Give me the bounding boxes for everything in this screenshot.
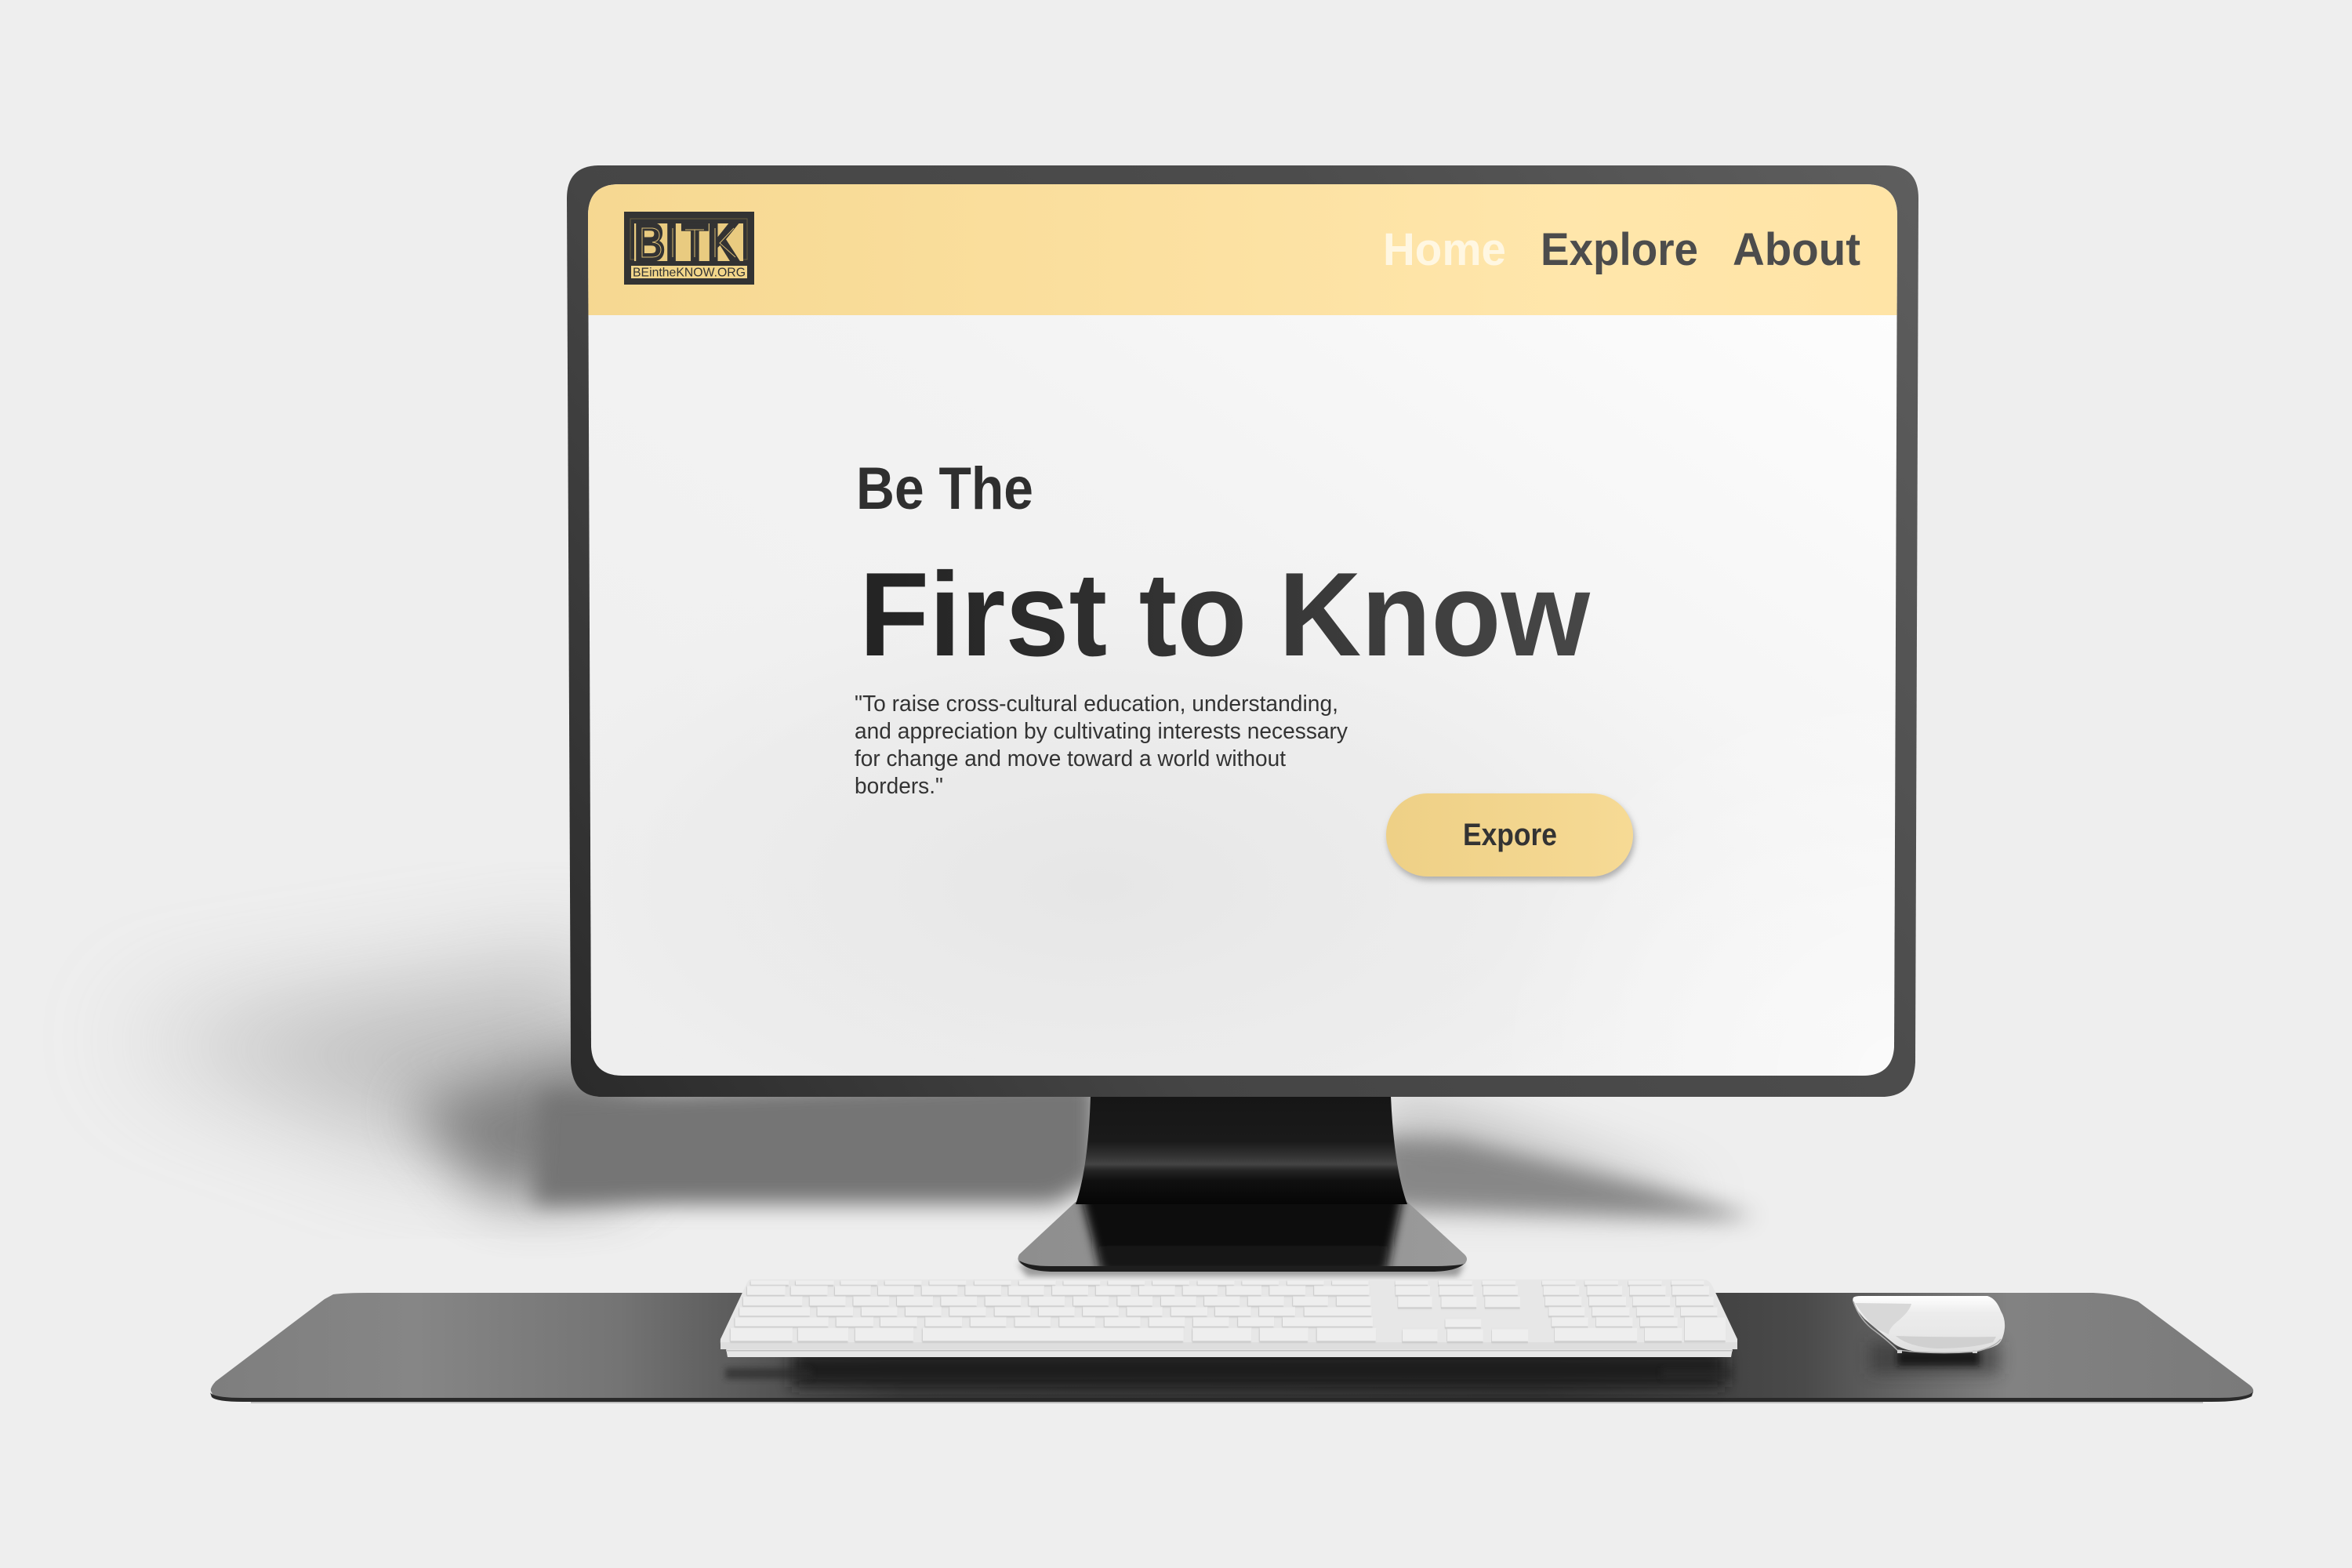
home row — [739, 1307, 1372, 1316]
mission quote: for change and move toward a world without — [855, 746, 1286, 771]
navigation keys — [1395, 1280, 1520, 1308]
keyboard body — [720, 1279, 1737, 1348]
stand base reflection — [1076, 1202, 1409, 1266]
monitor stand — [1018, 1096, 1467, 1276]
function row — [750, 1280, 1369, 1285]
stand base — [1018, 1202, 1467, 1269]
button: Expore — [1386, 793, 1633, 877]
navigation and numeric key blocks — [1395, 1280, 1726, 1341]
mouse feet — [1897, 1350, 1977, 1353]
keyboard bottom strip — [726, 1348, 1733, 1357]
mat front lip — [210, 1392, 2253, 1402]
heading: First to Know: First to Know — [859, 548, 1591, 681]
nav: About: About — [1733, 224, 1860, 275]
BITK logo: BEintheKNOW.ORG — [633, 267, 746, 279]
keyboard — [720, 1279, 1737, 1357]
cast shadow: left of monitor — [118, 956, 1098, 1204]
website header bar — [580, 176, 1905, 315]
stand base lip — [1019, 1261, 1467, 1272]
cast shadow: right of monitor — [1380, 1094, 1756, 1219]
desk mat — [210, 1293, 2253, 1403]
monitor bezel — [567, 165, 1918, 1097]
arrow keys — [1403, 1319, 1528, 1341]
mouse — [1853, 1296, 2005, 1374]
stand neck — [1076, 1096, 1407, 1204]
main key block — [731, 1280, 1376, 1341]
space bar row — [731, 1328, 1376, 1341]
button: Expore: Expore — [1463, 818, 1557, 852]
keyboard shadow on mat — [725, 1352, 1733, 1387]
mission quote: borders." — [855, 774, 943, 799]
nav: Home: Home — [1383, 224, 1506, 275]
numeric keypad — [1542, 1280, 1726, 1341]
BITK logo: BITK — [634, 212, 739, 272]
monitor — [567, 165, 1918, 1097]
nav: Explore: Explore — [1541, 224, 1698, 275]
mouse shadow — [1870, 1342, 1999, 1374]
mouse body — [1853, 1296, 2005, 1353]
number row — [747, 1286, 1370, 1295]
heading: Be The: Be The — [856, 456, 1033, 522]
mission quote: and appreciation by cultivating interests necessary — [855, 719, 1348, 744]
mission quote — [855, 691, 1348, 799]
mouse shell shading — [1855, 1303, 1911, 1334]
screen — [580, 176, 1905, 1086]
BITK logo — [624, 212, 754, 285]
shift row — [735, 1317, 1373, 1327]
stand contact shadow — [1018, 1264, 1465, 1276]
QWERTY row — [743, 1297, 1370, 1306]
mission quote: "To raise cross-cultural education, understanding, — [855, 691, 1338, 717]
